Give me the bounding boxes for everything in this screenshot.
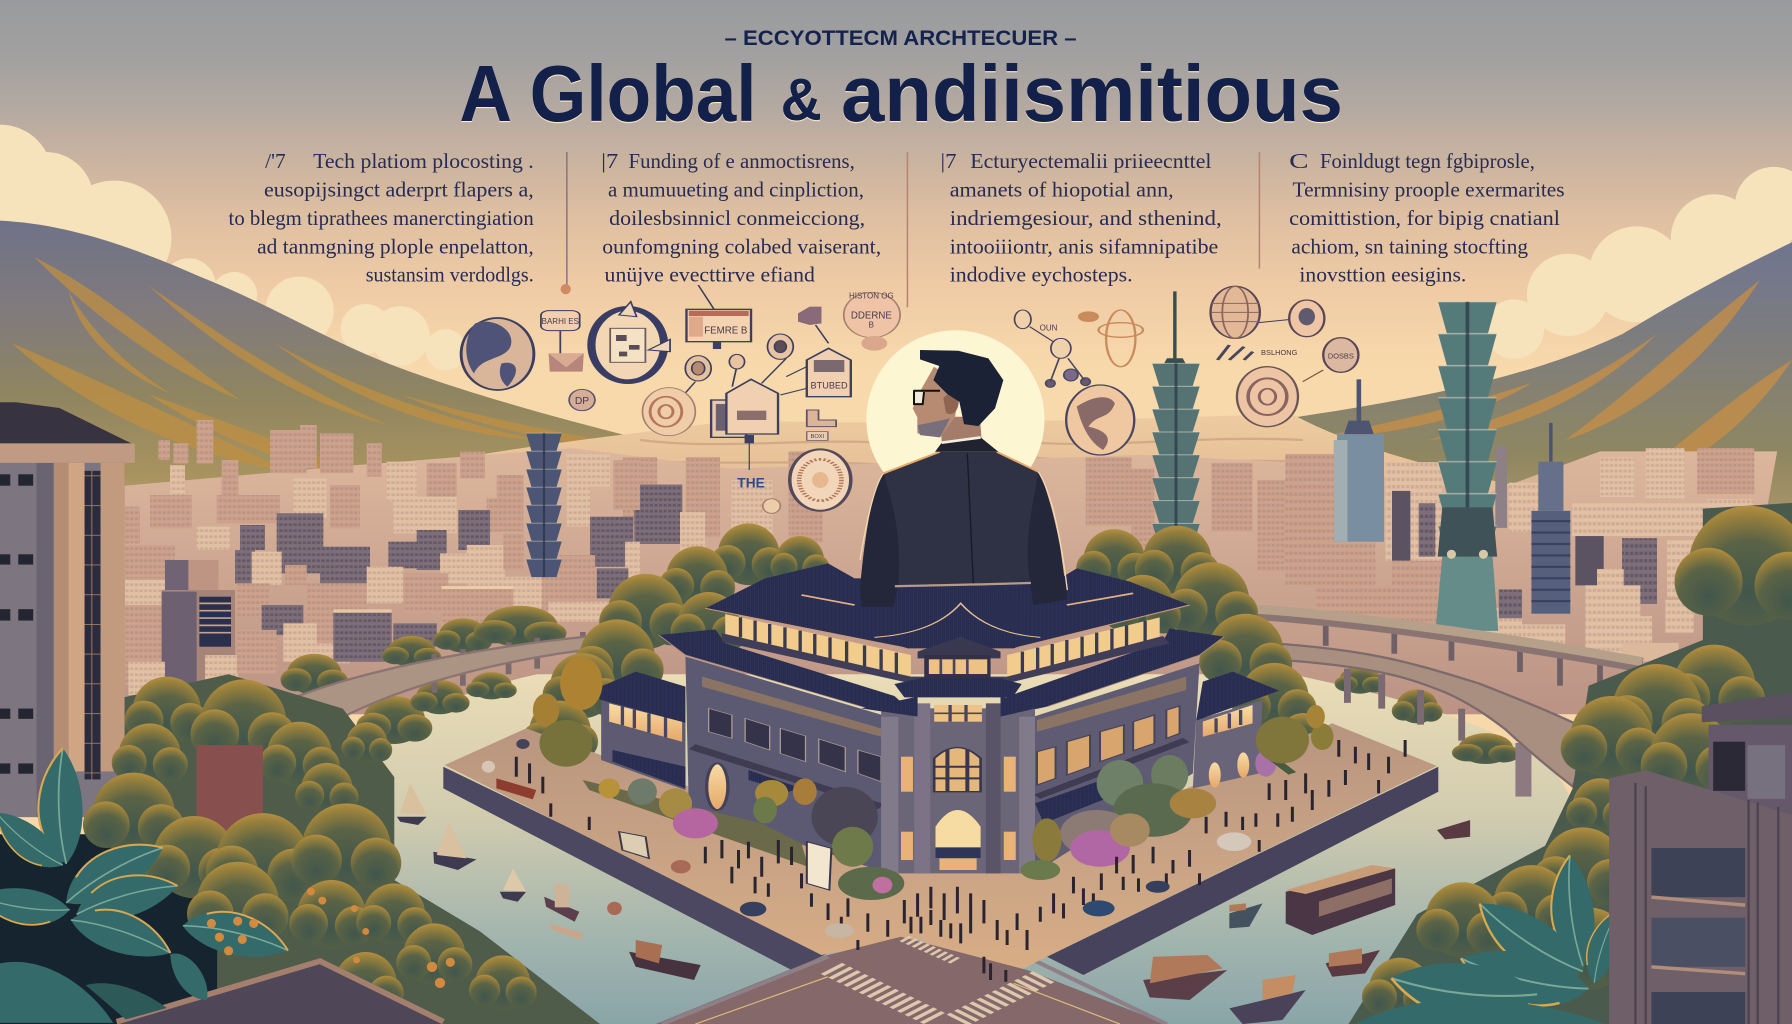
glasses — [913, 391, 940, 404]
roof edge under man — [895, 583, 1031, 586]
column 2 text: |7 — [601, 151, 618, 173]
icon: molecule and nodes: OUN — [1040, 324, 1058, 333]
hair — [920, 350, 1003, 426]
ferries and bus boat right — [1143, 820, 1470, 1024]
icon network right — [1015, 286, 1358, 455]
column 1 text — [229, 151, 534, 287]
icon: DP badge: DP — [575, 396, 589, 407]
icon: planet illustration — [1066, 385, 1134, 455]
column 4 text: inovsttion eesigins. — [1299, 265, 1466, 287]
column 3 text: Ecturyectemalii priieecnttel — [970, 151, 1212, 173]
column 1 text: Tech platiom plocosting . — [313, 151, 534, 173]
column 3 text: indriemgesiour, and sthenind, — [950, 208, 1222, 230]
city skyline base — [125, 448, 1777, 714]
quay walls — [443, 767, 1438, 975]
icon: small tag and round label — [798, 292, 900, 351]
orange fruits left — [207, 887, 455, 988]
elevated highways — [280, 609, 1642, 797]
title: & — [781, 66, 822, 133]
skyscraper: blue-grey tower — [1334, 379, 1384, 542]
jacket — [860, 452, 1067, 607]
icon: DOSBS badge and spiral coin — [1237, 338, 1358, 427]
column 1 text: eusopijsingct aderprt flapers a, — [264, 180, 534, 202]
clouds right — [1485, 167, 1792, 359]
icon network left — [461, 285, 900, 513]
river water — [346, 674, 1573, 1024]
column 3 text: |7 — [941, 151, 957, 173]
column 4 text — [1289, 151, 1565, 287]
icon: globe — [461, 318, 534, 390]
city centre far blocks — [623, 448, 1754, 581]
right wing — [1193, 672, 1279, 788]
collar — [935, 437, 998, 452]
column 1 text: /'7 — [265, 151, 286, 173]
main building scene — [397, 563, 1470, 1024]
column 2 text: unüjve evecttirve efiand — [605, 265, 816, 287]
garden right — [1020, 750, 1292, 880]
man in suit, seen from behind — [860, 350, 1067, 607]
column 2 text: Funding of e anmoctisrens, — [629, 151, 855, 173]
side trees near platform — [533, 657, 1333, 767]
left wing — [589, 672, 685, 790]
garden left — [583, 778, 904, 900]
mid hills haze band — [343, 414, 1600, 594]
column 1 text: to blegm tiprathees manerctingiation — [229, 208, 534, 230]
neck — [940, 417, 982, 442]
column 4 text: comittistion, for bipig cnatianl — [1289, 208, 1560, 230]
right wall with windows — [1034, 663, 1200, 873]
trees behind main building — [522, 523, 1332, 762]
palm leaves left — [0, 748, 294, 1023]
clouds left — [0, 125, 466, 370]
subtitle: – ECCYOTTECM ARCHTECUER – — [725, 27, 1077, 50]
second-tier roofs — [659, 628, 1224, 717]
city left buildings — [125, 420, 640, 695]
skyscraper: navy spire tower right — [1531, 423, 1570, 614]
icon: house document — [711, 379, 778, 470]
icon: molecule and nodes — [1015, 310, 1143, 387]
icon: monitor — [686, 285, 751, 349]
left wall with windows — [685, 657, 888, 873]
icon: THE label and medallion — [737, 449, 851, 513]
column 4 text: C — [1289, 151, 1309, 173]
right tree cluster — [1349, 503, 1792, 1024]
crowds of people — [516, 740, 1405, 982]
icon: wood ring coin — [642, 388, 695, 436]
icon: label bubble and envelope: BARHI ES — [542, 317, 579, 326]
face — [913, 367, 960, 437]
column 1 text: ad tanmgning plople enpelatton, — [257, 237, 534, 259]
icon: label bubble and envelope — [541, 311, 584, 372]
icon: circular arrows with document — [591, 302, 670, 382]
top roof — [705, 563, 1190, 648]
icon: monitor: FEMRE B — [704, 325, 747, 336]
column divider 1 — [561, 152, 571, 294]
title: A Global — [459, 49, 757, 138]
icon: small tag and round label: DDERNE — [851, 310, 892, 321]
title: andiismitious — [841, 49, 1343, 138]
mountains right — [1143, 242, 1792, 549]
column 2 text: a mumuueting and cinpliction, — [608, 180, 864, 202]
icon: THE label and medallion: THE — [737, 475, 765, 490]
clerestory glowing window bands — [722, 614, 1170, 683]
foreground building right — [1609, 693, 1792, 1024]
icon: tag BTUBED: BTUBED — [811, 380, 848, 390]
icon: DOSBS badge and spiral coin: DOSBS — [1328, 351, 1354, 360]
vehicles on plaza — [482, 739, 1251, 938]
icon: small BOXI box — [807, 410, 836, 440]
icon: wire globe and seal — [1211, 286, 1324, 338]
palm leaves right — [1355, 854, 1631, 1024]
centre gable — [874, 603, 1040, 678]
column 4 text: achiom, sn taining stocfting — [1291, 237, 1528, 259]
centre tower facade — [861, 678, 1050, 873]
icon: small BOXI box: BOXI — [811, 434, 825, 440]
icon: tag BTUBED — [807, 348, 851, 397]
halo behind man — [866, 330, 1045, 509]
column 3 text: indodive eychosteps. — [950, 265, 1133, 287]
city right buildings — [1285, 446, 1754, 661]
icon: small tag and round label: B — [869, 321, 874, 330]
column 2 text: doilesbsinnicl conmeicciong, — [609, 208, 865, 230]
skyscraper: navy tower left — [526, 433, 562, 577]
road crossing — [656, 937, 1166, 1024]
column divider 2 — [906, 152, 908, 307]
column divider 3 — [1258, 152, 1260, 269]
icon: link chain with label — [1218, 345, 1298, 360]
column 2 text — [601, 151, 881, 287]
mid-left tree cluster — [0, 674, 600, 1024]
title — [459, 49, 1343, 138]
column 3 text: amanets of hiopotial ann, — [950, 180, 1174, 202]
icon: link chain with label: BSLHONG — [1261, 348, 1298, 357]
skyscraper: teal spire tower centre-right — [1150, 291, 1200, 553]
icon: small tag and round label: HISTON OG — [849, 292, 894, 301]
column 2 text: ounfomgning colabed vaiserant, — [602, 237, 881, 259]
foreground tower left — [0, 402, 135, 817]
icon: DP badge — [569, 389, 595, 411]
column 1 text: sustansim verdodlgs. — [366, 265, 534, 287]
column 3 text: intooiiiontr, anis sifamnipatibe — [950, 237, 1218, 259]
icon: coins and link lines — [681, 334, 807, 398]
foreground roof bottom-left — [117, 961, 443, 1024]
plaza promenade — [445, 723, 1437, 980]
column 3 text — [941, 151, 1222, 287]
mountains left — [0, 221, 731, 537]
skyscraper: large teal tower — [1435, 302, 1498, 631]
shoreline trees under highways — [280, 606, 1520, 764]
sailboats and boats left — [397, 783, 701, 980]
column 4 text: Foinldugt tegn fgbiprosle, — [1320, 151, 1535, 173]
column 4 text: Termnisiny proople exermarites — [1293, 180, 1565, 202]
